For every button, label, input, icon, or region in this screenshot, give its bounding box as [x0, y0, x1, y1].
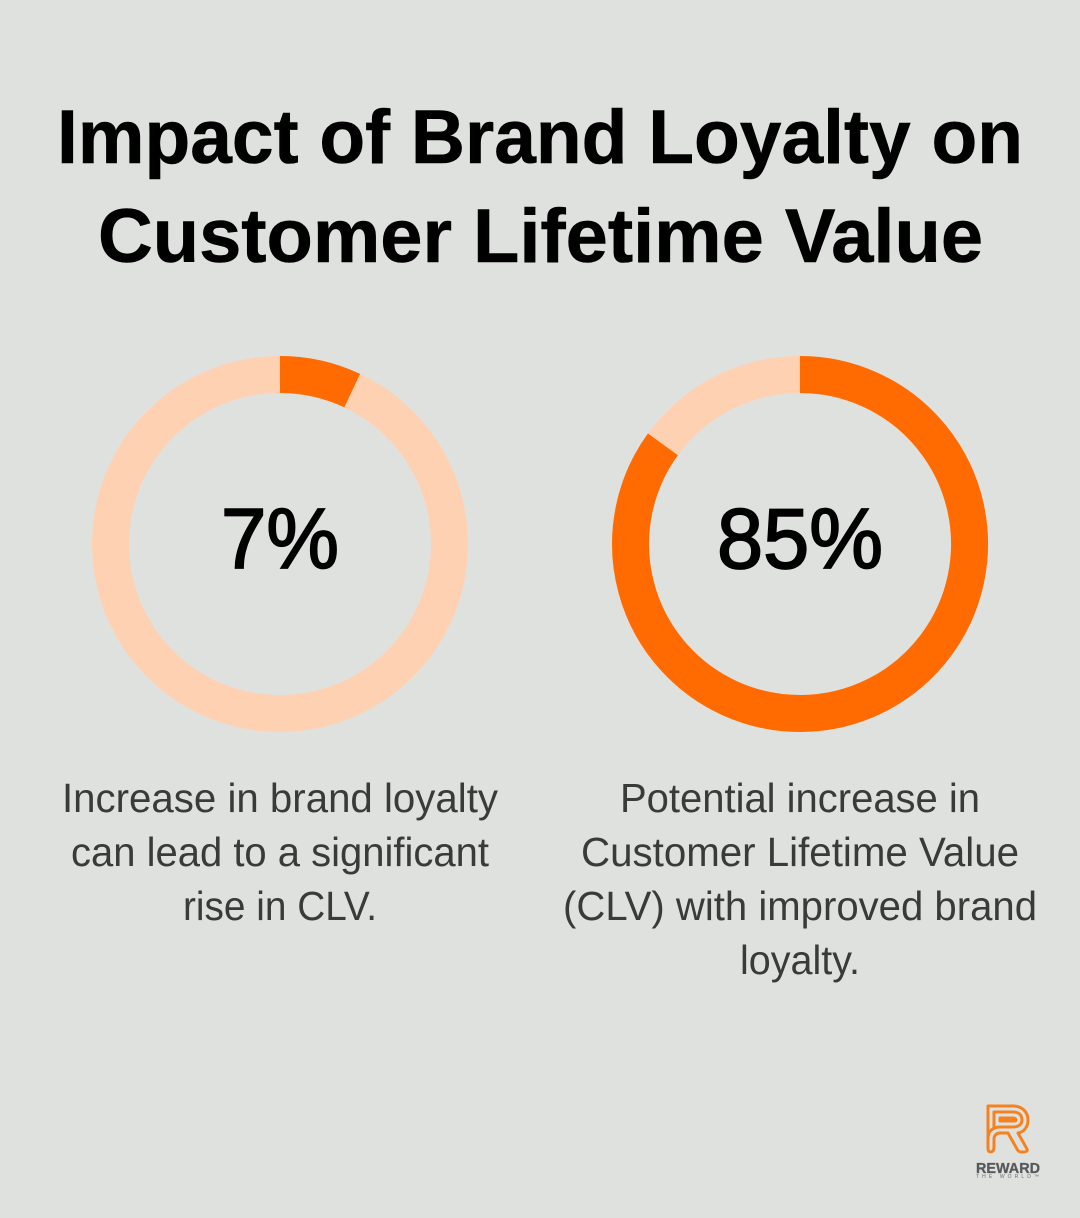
donut chart: 85% — [630, 374, 970, 714]
logo tagline: THE WORLD™ — [976, 1174, 1039, 1180]
description: 7%: Increase in brand loyalty — [62, 775, 498, 821]
panel: 7% statistic — [62, 374, 498, 929]
logo wordmark: REWARD — [976, 1160, 1040, 1177]
icon: R mark — [988, 1106, 1028, 1152]
title: Impact of Brand Loyalty on — [57, 95, 1023, 180]
description: 7%: can lead to a significant — [71, 829, 490, 875]
description: 7%: rise in CLV. — [183, 883, 377, 929]
logo: Reward the World — [976, 1106, 1040, 1180]
description: 85%: (CLV) with improved brand — [563, 883, 1037, 929]
description: 85% — [563, 775, 1037, 983]
description: 85%: Customer Lifetime Value — [581, 829, 1019, 875]
description: 7% — [62, 775, 498, 929]
description: 85%: loyalty. — [740, 937, 860, 983]
value: 85%: 85% — [717, 492, 883, 587]
title — [57, 95, 1023, 279]
title: Customer Lifetime Value — [98, 194, 983, 279]
donut chart: 7% — [110, 374, 450, 714]
value: 7%: 7% — [221, 492, 339, 587]
panel: 85% statistic — [563, 374, 1037, 983]
description: 85%: Potential increase in — [620, 775, 980, 821]
